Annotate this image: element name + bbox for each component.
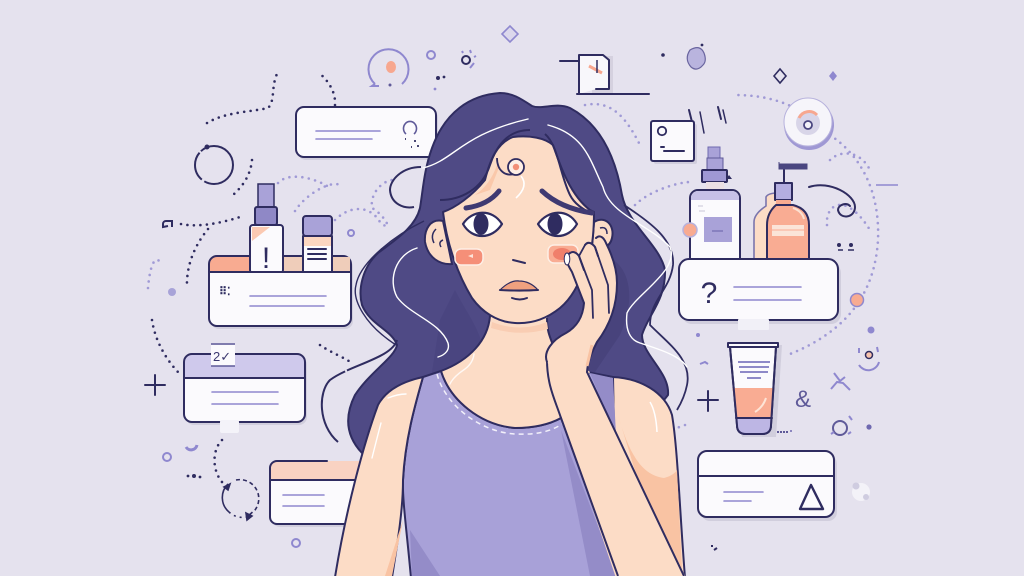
product: left small jar cap	[303, 216, 332, 236]
swirl right	[809, 185, 855, 216]
plus sign right	[698, 391, 718, 411]
eyebrows	[466, 191, 592, 213]
left eye	[463, 213, 502, 236]
icon: target circle top	[368, 49, 408, 86]
nose	[513, 260, 525, 263]
label: exclamation mark: !	[262, 242, 270, 275]
icon: note with marker	[560, 55, 649, 94]
icon: small hook left	[163, 221, 172, 227]
small tag under card	[220, 420, 239, 433]
label: question mark: ?	[701, 277, 717, 310]
product: right pump bottle	[690, 147, 740, 260]
product: left spray bottle top	[255, 184, 277, 225]
hand	[546, 236, 617, 380]
product: right back bottle	[754, 193, 790, 260]
woman figure	[322, 93, 692, 576]
icon: dashed cycle arrows	[222, 480, 259, 520]
hair fringe strands	[440, 130, 530, 200]
icon: small gear top	[434, 50, 476, 90]
plus sign left	[145, 375, 165, 395]
loose hair strand left	[390, 167, 421, 207]
ampersand: &	[795, 386, 811, 413]
card: left lavender header	[184, 354, 307, 425]
left ear	[425, 221, 452, 264]
dotted connector paths and small background marks	[148, 26, 898, 550]
darker hair shade	[585, 255, 629, 372]
box: top right icon card	[651, 121, 697, 164]
tank top	[403, 371, 617, 576]
sticky note: checklist	[211, 344, 235, 366]
right eye	[538, 213, 577, 236]
hair back	[348, 93, 668, 470]
card: left with salmon header and bottles: ⠿⁚	[219, 286, 231, 298]
small icons right	[696, 333, 879, 501]
card: bottom right with triangle	[698, 451, 837, 521]
card: top left	[296, 107, 438, 160]
forehead spot	[508, 159, 524, 175]
small tag under right card	[738, 319, 769, 330]
card: bottom left with salmon header	[270, 461, 370, 527]
icon: ring top left	[195, 146, 233, 184]
icon: salmon ball on bottle	[683, 223, 697, 237]
icon: disc top right	[784, 98, 834, 150]
sticky note: checklist: 2✓	[213, 349, 231, 364]
forearm	[547, 340, 692, 576]
card: left with salmon header and bottles	[209, 225, 353, 329]
product: right front pump bottle	[767, 162, 809, 260]
cheek irritation patch right	[548, 245, 578, 263]
card: right with question mark	[679, 259, 841, 324]
product: tube	[728, 343, 782, 437]
right ear	[592, 220, 613, 248]
neck	[441, 316, 590, 428]
right arm behind	[590, 377, 686, 576]
icon: blob top right	[661, 44, 705, 69]
face	[443, 136, 594, 323]
salmon ball right	[850, 294, 864, 306]
cheek irritation patch left	[455, 249, 483, 265]
left arm and shoulder	[333, 377, 423, 576]
hair highlights	[393, 119, 687, 367]
loose hair strand right	[624, 205, 688, 410]
mouth	[500, 281, 538, 300]
